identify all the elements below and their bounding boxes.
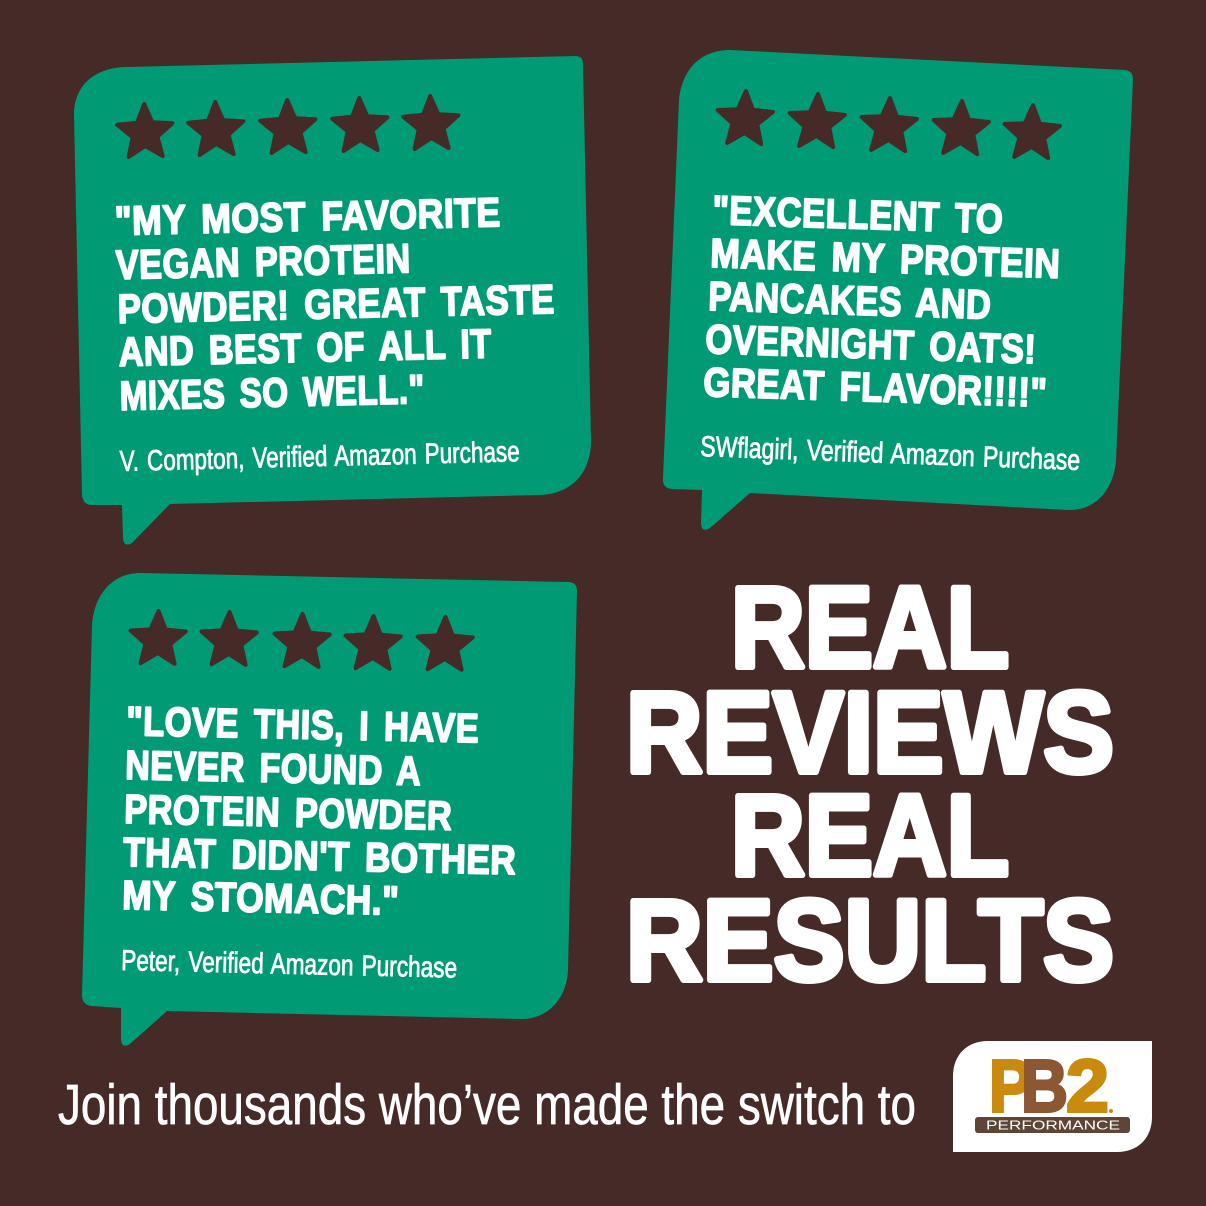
logo registered mark (1109, 1109, 1113, 1113)
logo wordmark (989, 1044, 1109, 1128)
panel: review by Peter (82, 573, 577, 1046)
heading: real reviews real results: RESULTS (626, 877, 1114, 1005)
quote 1: "MY MOST FAVORITE (114, 189, 501, 244)
speech bubble 3 (82, 573, 577, 1046)
logo: PB2 Performance (953, 1041, 1152, 1152)
heading: real reviews real results: REAL (731, 564, 1009, 692)
logo wordmark: 2 (1066, 1044, 1109, 1128)
logo performance text: PERFORMANCE (986, 1118, 1120, 1132)
speech bubble 1 (74, 56, 591, 545)
heading: real reviews real results: REAL (731, 772, 1009, 900)
quote 2: GREAT FLAVOR!!!!" (703, 359, 1048, 416)
panel: review by SWflagirl (663, 50, 1133, 530)
attribution 3: Peter, Verified Amazon Purchase (121, 945, 457, 985)
quote 3: PROTEIN POWDER (124, 786, 453, 839)
quote 3: NEVER FOUND A (125, 742, 422, 794)
logo performance bar (975, 1117, 1130, 1133)
logo wordmark: P (989, 1044, 1032, 1128)
five star rating 2 (717, 90, 1061, 158)
five star rating 3 (130, 611, 473, 670)
quote 2: OVERNIGHT OATS! (705, 316, 1037, 372)
attribution 1: V. Compton, Verified Amazon Purchase (119, 436, 520, 478)
heading: real reviews real results: REVIEWS (626, 669, 1114, 797)
quote 2: PANCAKES AND (708, 273, 992, 328)
panel: review by V. Compton (74, 56, 591, 545)
speech bubble 2 (663, 50, 1133, 530)
quote 2: "EXCELLENT TO (712, 187, 1004, 242)
quote 1: POWDER! GREAT TASTE (117, 276, 555, 332)
logo wordmark: B (1021, 1044, 1068, 1128)
attribution 2: SWflagirl, Verified Amazon Purchase (700, 431, 1081, 477)
quote 1: AND BEST OF ALL IT (118, 321, 492, 375)
call to action text: Join thousands who’ve made the switch to (58, 1073, 916, 1137)
quote 3: MY STOMACH." (122, 872, 400, 924)
quote 3: "LOVE THIS, I HAVE (126, 698, 480, 751)
quote 2: MAKE MY PROTEIN (710, 230, 1061, 287)
five star rating 1 (117, 95, 459, 157)
quote 3: THAT DIDN'T BOTHER (123, 829, 517, 883)
quote 1 (114, 189, 555, 419)
quote 2 (703, 187, 1061, 416)
quote 1: MIXES SO WELL." (119, 366, 425, 419)
quote 3 (122, 698, 517, 924)
logo background (953, 1041, 1152, 1152)
heading: real reviews real results (626, 564, 1114, 1005)
quote 1: VEGAN PROTEIN (115, 235, 411, 288)
